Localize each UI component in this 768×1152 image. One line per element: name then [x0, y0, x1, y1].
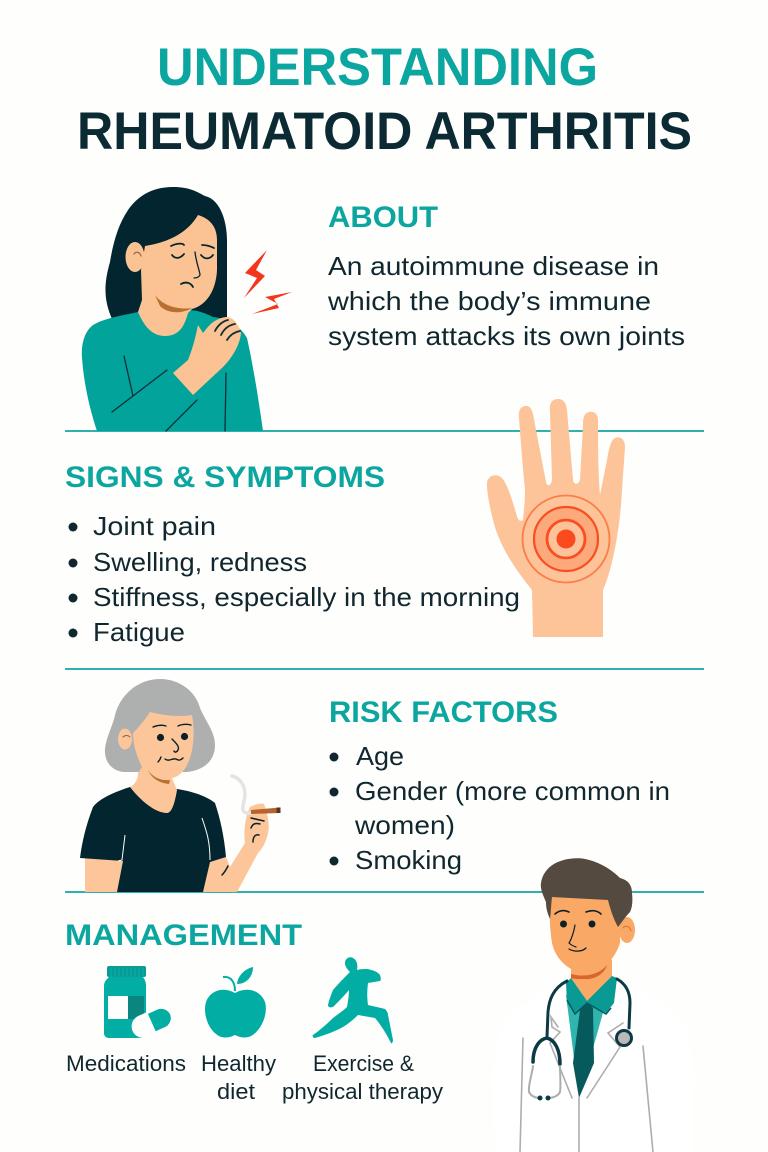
- heading: signs and symptoms: SIGNS & SYMPTOMS: [65, 461, 385, 494]
- pain bolts: [244, 250, 267, 298]
- list: risk factors: Smoking: [355, 845, 462, 875]
- neck and face: [138, 215, 217, 336]
- hair: [105, 187, 227, 321]
- hand on shoulder: [173, 317, 241, 395]
- coat seams and lapels: [520, 1017, 653, 1152]
- icon: apple: [205, 967, 266, 1038]
- text: exercise and physical therapy: [282, 1051, 443, 1104]
- face: [550, 895, 620, 974]
- illustration: older woman smoking: [80, 679, 280, 892]
- heading: management: MANAGEMENT: [65, 919, 302, 952]
- tie: [573, 1002, 594, 1098]
- text: healthy diet: diet: [217, 1079, 255, 1104]
- facial features: [123, 724, 264, 875]
- text: about description: An autoimmune disease in: [328, 251, 659, 281]
- text: about description: which the body’s immune: [327, 286, 651, 316]
- neck: [571, 960, 612, 1001]
- text: healthy diet: [201, 1051, 276, 1104]
- left arm: [85, 855, 125, 892]
- illustration: woman holding painful shoulder: [82, 187, 292, 431]
- list: symptoms: Fatigue: [93, 617, 185, 647]
- icon: exercise figure: [313, 957, 393, 1043]
- text: about description: system attacks its own joints: [328, 321, 685, 351]
- list: risk factors: women): [354, 810, 455, 840]
- list: symptoms: Joint pain: [93, 511, 216, 541]
- smoke: [232, 776, 252, 813]
- illustration: hand with inflamed palm: [487, 399, 625, 637]
- text: exercise and physical therapy: physical therapy: [282, 1079, 443, 1104]
- illustration: doctor with stethoscope: [492, 858, 694, 1152]
- heading: about: ABOUT: [328, 201, 438, 234]
- hair: [105, 679, 215, 772]
- heading: risk factors: RISK FACTORS: [329, 696, 558, 729]
- title: [77, 38, 692, 161]
- facial features: [555, 911, 631, 951]
- text: about description: [327, 251, 685, 351]
- text: medications: Medications: [66, 1051, 186, 1076]
- shirt: [80, 787, 226, 892]
- collar: [566, 976, 617, 1014]
- list: symptoms: Swelling, redness: [93, 547, 307, 577]
- list: risk factors: Gender (more common in: [355, 776, 670, 806]
- stethoscope: [529, 979, 630, 1098]
- list: symptoms: Stiffness, especially in the morning: [93, 582, 520, 612]
- text: healthy diet: Healthy: [201, 1051, 276, 1076]
- text: exercise and physical therapy: Exercise &: [313, 1051, 414, 1076]
- list: risk factors: [330, 741, 670, 875]
- shirt: [566, 995, 608, 1098]
- inflammation rings: [522, 496, 610, 582]
- right arm and hand: [203, 804, 269, 892]
- list: risk factors: Age: [356, 741, 404, 771]
- cigarette: [251, 808, 280, 814]
- list: symptoms: [68, 511, 520, 647]
- title: UNDERSTANDING: [157, 38, 598, 97]
- body: [82, 310, 263, 431]
- neck and face: [130, 712, 194, 813]
- hair: [541, 858, 632, 927]
- white coat: [492, 980, 694, 1152]
- title: RHEUMATOID ARTHRITIS: [77, 102, 692, 161]
- icon: medication bottle and pill: [104, 966, 176, 1042]
